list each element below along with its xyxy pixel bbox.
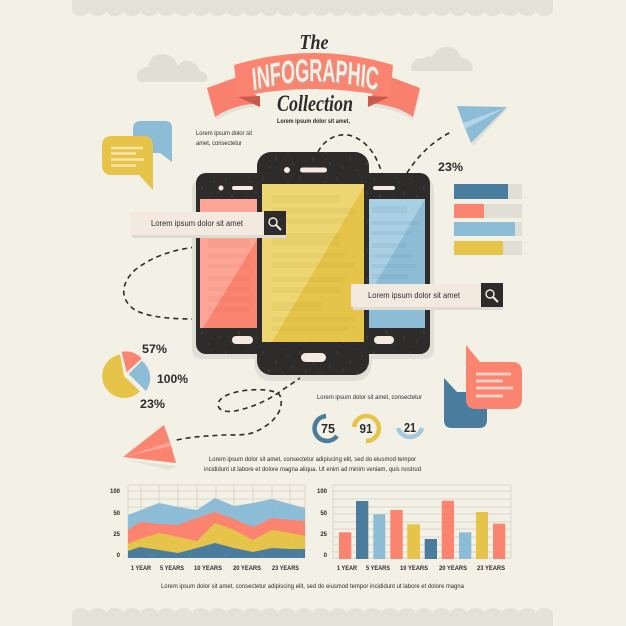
gauge 75: 75 xyxy=(321,421,335,436)
cloud left xyxy=(137,54,207,82)
horizontal progress bars xyxy=(454,184,522,255)
bar chart y axis: 50 xyxy=(320,511,328,517)
bar chart x axis: 10 YEARS xyxy=(400,566,428,572)
pie label 23: 23% xyxy=(140,397,165,411)
subtitle: Lorem ipsum dolor sit amet, xyxy=(277,119,350,125)
title: INFOGRAPHIC: INFOGRAPHIC xyxy=(254,61,380,92)
caption top left: Lorem ipsum dolor sit xyxy=(196,131,252,137)
area chart x axis: 5 YEARS xyxy=(160,566,184,572)
phone shadows xyxy=(192,179,434,381)
dashed path to blue plane xyxy=(407,131,453,173)
area chart x axis xyxy=(131,566,299,572)
bar chart x axis: 1 YEAR xyxy=(337,566,358,572)
area chart y axis: 100 xyxy=(110,489,121,495)
gauge 91: 91 xyxy=(360,421,372,436)
search bar left xyxy=(130,211,286,238)
gauge 21: 21 xyxy=(404,420,416,435)
phone left xyxy=(196,173,316,354)
area chart y axis: 50 xyxy=(113,511,121,517)
bar chart x axis: 23 YEARS xyxy=(477,566,505,572)
title: Collection: Collection xyxy=(277,91,353,116)
bar chart y axis xyxy=(317,489,328,559)
paragraph line 2: incididunt ut labore et dolore magna aliqua. Ut enim ad minim veniam, quis nostrud xyxy=(204,467,421,473)
gauge 91 xyxy=(354,416,379,441)
phone centre xyxy=(257,152,369,375)
bar chart y axis: 0 xyxy=(324,553,328,559)
search bar left: Lorem ipsum dolor sit amet xyxy=(151,219,244,228)
dashed loop path xyxy=(177,378,300,440)
top scalloped band xyxy=(72,0,553,16)
search bar right: Lorem ipsum dolor sit amet xyxy=(368,291,461,300)
caption top left xyxy=(196,131,252,147)
dashed path left xyxy=(124,247,196,319)
bar chart x axis xyxy=(337,566,505,572)
pie label 57: 57% xyxy=(142,342,167,356)
area chart x axis: 10 YEARS xyxy=(194,566,222,572)
speech bubbles top left xyxy=(102,121,172,190)
ribbon banner xyxy=(207,53,420,120)
area chart x axis: 1 YEAR xyxy=(131,566,152,572)
speech bubbles bottom right xyxy=(444,345,522,428)
area chart y axis: 25 xyxy=(113,532,121,538)
gauge 21 xyxy=(398,420,422,437)
bar chart y axis: 100 xyxy=(317,489,328,495)
dashed path top xyxy=(318,135,382,173)
bar chart y axis: 25 xyxy=(320,532,328,538)
paragraph: Lorem ipsum dolor sit amet, consectetur adipiscing elit, sed do eiusmod tempor xyxy=(209,457,416,463)
pie label 100: 100% xyxy=(157,372,188,386)
bottom scalloped band xyxy=(72,608,553,626)
area chart x axis: 20 YEARS xyxy=(233,566,261,572)
area chart y axis xyxy=(110,489,121,559)
area chart y axis: 0 xyxy=(117,553,121,559)
area chart xyxy=(128,485,305,558)
area chart x axis: 23 YEARS xyxy=(272,566,299,572)
gauge 75 xyxy=(315,416,337,441)
phone right xyxy=(310,173,430,354)
bar chart x axis: 20 YEARS xyxy=(439,566,467,572)
caption top left: amet, consectetur xyxy=(196,141,242,147)
search bar right xyxy=(351,283,503,310)
paper plane blue xyxy=(457,106,507,146)
paper plane coral xyxy=(123,425,176,470)
cloud right xyxy=(411,47,473,71)
title: The: The xyxy=(300,30,328,54)
footer text: Lorem ipsum dolor sit amet, consectetur adipiscing elit, sed do eiusmod tempor incididunt ut labore et dolore magna xyxy=(161,584,465,590)
bar chart xyxy=(333,485,511,559)
caption above gauges: Lorem ipsum dolor sit amet, consectetur xyxy=(317,395,422,401)
title: INFOGRAPHIC: INFOGRAPHIC xyxy=(252,59,378,90)
bar chart x axis: 5 YEARS xyxy=(366,566,390,572)
percentage 23 top right: 23% xyxy=(438,160,463,174)
pie chart xyxy=(102,351,150,398)
